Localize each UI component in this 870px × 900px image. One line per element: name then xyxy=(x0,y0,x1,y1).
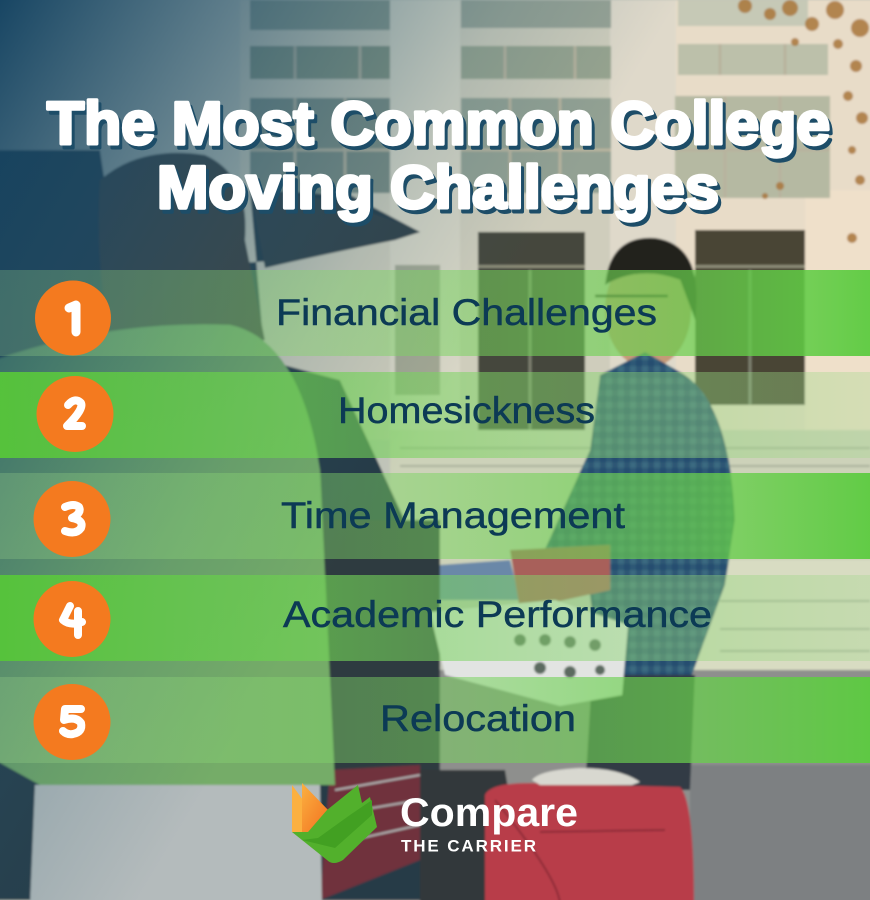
title shadow xyxy=(50,94,833,225)
man: jeans xyxy=(585,675,695,790)
number badge 3 xyxy=(34,481,110,557)
label 2: Homesickness xyxy=(338,390,595,431)
title text: The Most Common College xyxy=(47,90,830,157)
red items in boot xyxy=(320,765,420,900)
window rows xyxy=(250,0,830,198)
title shadow: The Most Common College xyxy=(50,94,833,161)
band 2: homesickness xyxy=(0,372,870,458)
pillars xyxy=(390,0,460,440)
books in basket xyxy=(440,560,520,600)
title shadow: Moving Challenges xyxy=(160,158,722,225)
woman: sweater xyxy=(0,324,335,785)
entrance doors xyxy=(478,232,585,432)
autumn tree leaves xyxy=(738,0,869,243)
title xyxy=(47,90,833,225)
building facade xyxy=(620,0,870,440)
band 3: time management xyxy=(0,473,870,559)
woman: trousers xyxy=(30,785,322,900)
black bag xyxy=(420,770,520,900)
steps xyxy=(390,430,870,570)
logo tagline: THE CARRIER xyxy=(401,836,536,856)
label 1: Financial Challenges xyxy=(276,292,657,333)
red suitcase xyxy=(485,783,694,900)
label 3: Time Management xyxy=(281,495,626,536)
band 5: relocation xyxy=(0,677,870,763)
number badge 5 xyxy=(34,684,110,760)
band 4: academic performance xyxy=(0,575,870,661)
number badge 4 xyxy=(34,581,110,657)
man: head and glasses xyxy=(605,252,691,368)
band 1: financial challenges xyxy=(0,270,870,356)
logo: Compare the Carrier xyxy=(292,783,578,863)
label 5: Relocation xyxy=(380,698,576,739)
woman: hair xyxy=(99,153,265,340)
number badge 1 xyxy=(35,280,111,356)
laundry basket xyxy=(430,600,628,706)
logo icon xyxy=(292,783,377,863)
title text xyxy=(47,90,830,221)
logo wordmark: Compare xyxy=(400,791,578,835)
label 4: Academic Performance xyxy=(283,594,712,635)
number badge 2 xyxy=(36,376,114,452)
title text: Moving Challenges xyxy=(157,154,719,221)
man: shirt xyxy=(540,352,735,680)
car body and boot xyxy=(0,150,430,900)
ground xyxy=(300,670,870,900)
